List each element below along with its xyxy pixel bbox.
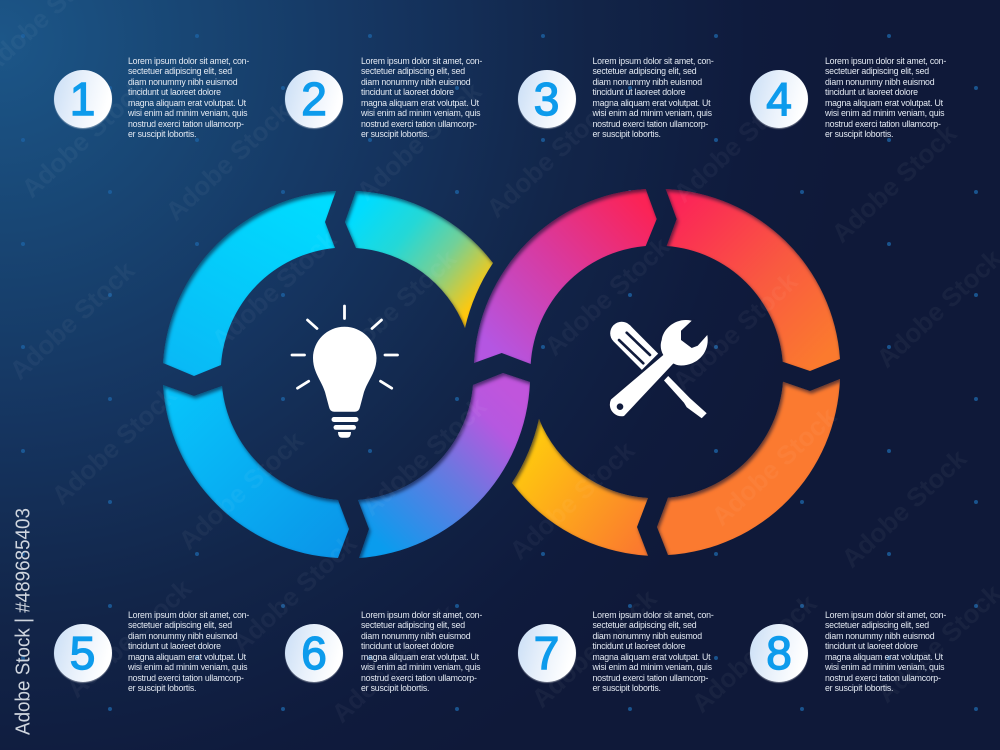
text 7: diam nonummy nibh euismod	[592, 630, 702, 640]
text 2: wisi enim ad minim veniam, quis	[361, 108, 480, 118]
badge 7: 7	[534, 627, 559, 679]
badge 4: 4	[766, 73, 792, 125]
text 6	[361, 610, 482, 693]
step 3	[518, 56, 714, 139]
text 1: sectetuer adipiscing elit, sed	[128, 66, 232, 76]
text 5: diam nonummy nibh euismod	[128, 630, 237, 640]
watermarks: Adobe Stock	[667, 266, 804, 397]
text 3: wisi enim ad minim veniam, quis	[592, 108, 712, 118]
badge 3	[518, 70, 576, 128]
watermarks: Adobe Stock	[539, 231, 676, 362]
badge 7	[518, 624, 576, 682]
vertical stock id: Adobe Stock | #489685403	[12, 508, 34, 735]
text 6: er suscipit lobortis.	[361, 683, 429, 693]
watermarks: Adobe Stock	[46, 380, 183, 511]
text 4	[825, 56, 946, 139]
text 8: tincidunt ut laoreet dolore	[825, 641, 918, 651]
segment: magenta top left	[474, 189, 657, 364]
text 5: magna aliquam erat volutpat. Ut	[128, 652, 246, 662]
watermarks: Adobe Stock	[326, 243, 463, 374]
text 7: er suscipit lobortis.	[592, 683, 661, 693]
text 3	[592, 56, 714, 139]
text 4: er suscipit lobortis.	[825, 129, 893, 139]
text 7: magna aliquam erat volutpat. Ut	[592, 652, 710, 662]
text 4: diam nonummy nibh euismod	[825, 76, 934, 86]
right ring	[474, 189, 840, 556]
text 7: Lorem ipsum dolor sit amet, con-	[592, 610, 714, 620]
text 4: nostrud exerci tation ullamcorp-	[825, 118, 941, 128]
text 8: wisi enim ad minim veniam, quis	[825, 662, 944, 672]
badge 3: 3	[534, 73, 559, 125]
icon: light bulb	[292, 306, 398, 438]
text 4: tincidunt ut laoreet dolore	[825, 87, 918, 97]
badge 8	[750, 624, 808, 682]
text 6: magna aliquam erat volutpat. Ut	[361, 652, 479, 662]
text 6: diam nonummy nibh euismod	[361, 630, 470, 640]
text 4: magna aliquam erat volutpat. Ut	[825, 98, 943, 108]
text 3: magna aliquam erat volutpat. Ut	[592, 98, 710, 108]
text 3: er suscipit lobortis.	[592, 129, 661, 139]
text 6: sectetuer adipiscing elit, sed	[361, 620, 465, 630]
text 8	[825, 610, 946, 693]
text 7: nostrud exerci tation ullamcorp-	[592, 672, 708, 682]
watermarks: Adobe Stock	[206, 224, 343, 355]
watermarks: Adobe Stock	[351, 76, 488, 207]
text 5	[128, 610, 249, 693]
text 2: nostrud exerci tation ullamcorp-	[361, 118, 477, 128]
badge 1	[54, 70, 112, 128]
badge 4	[750, 70, 808, 128]
text 2: er suscipit lobortis.	[361, 129, 429, 139]
segment: yellow bottom left	[512, 419, 648, 556]
text 3: tincidunt ut laoreet dolore	[592, 87, 685, 97]
text 8: Lorem ipsum dolor sit amet, con-	[825, 610, 946, 620]
text 2: sectetuer adipiscing elit, sed	[361, 66, 465, 76]
watermarks: Adobe Stock	[4, 255, 141, 386]
text 5: Lorem ipsum dolor sit amet, con-	[128, 610, 249, 620]
badge 6	[285, 624, 343, 682]
badge 1: 1	[70, 73, 95, 125]
text 1: magna aliquam erat volutpat. Ut	[128, 98, 246, 108]
text 3: Lorem ipsum dolor sit amet, con-	[592, 56, 714, 66]
segment: red top right	[666, 189, 840, 371]
watermarks: Adobe Stock	[226, 528, 363, 659]
text 2: Lorem ipsum dolor sit amet, con-	[361, 56, 482, 66]
watermarks: Adobe Stock	[160, 96, 297, 227]
left ring	[163, 191, 530, 558]
text 5: wisi enim ad minim veniam, quis	[128, 662, 247, 672]
text 4: sectetuer adipiscing elit, sed	[825, 66, 929, 76]
text 6: wisi enim ad minim veniam, quis	[361, 662, 480, 672]
text 1: tincidunt ut laoreet dolore	[128, 87, 221, 97]
text 8: diam nonummy nibh euismod	[825, 630, 934, 640]
text 6: Lorem ipsum dolor sit amet, con-	[361, 610, 482, 620]
text 6: tincidunt ut laoreet dolore	[361, 641, 454, 651]
text 8: er suscipit lobortis.	[825, 683, 893, 693]
text 3: diam nonummy nibh euismod	[592, 76, 702, 86]
text 5: nostrud exerci tation ullamcorp-	[128, 672, 244, 682]
text 7: wisi enim ad minim veniam, quis	[592, 662, 712, 672]
step 6	[284, 610, 482, 693]
text 8: magna aliquam erat volutpat. Ut	[825, 652, 943, 662]
text 5: tincidunt ut laoreet dolore	[128, 641, 221, 651]
badge 5	[54, 624, 112, 682]
text 7: tincidunt ut laoreet dolore	[592, 641, 685, 651]
badge 2: 2	[301, 73, 327, 125]
text 1: nostrud exerci tation ullamcorp-	[128, 118, 244, 128]
text 1: Lorem ipsum dolor sit amet, con-	[128, 56, 249, 66]
watermarks: Adobe Stock	[668, 78, 805, 209]
text 6: nostrud exerci tation ullamcorp-	[361, 672, 477, 682]
segment: top left	[163, 191, 336, 376]
text 8: nostrud exerci tation ullamcorp-	[825, 672, 941, 682]
text 5: sectetuer adipiscing elit, sed	[128, 620, 232, 630]
icon: crossed wrench and screwdriver	[610, 320, 708, 418]
watermarks: Adobe Stock	[16, 73, 153, 204]
watermarks: Adobe Stock	[356, 391, 493, 522]
badge 8: 8	[766, 627, 792, 679]
step 7	[518, 610, 714, 693]
text 1: diam nonummy nibh euismod	[128, 76, 237, 86]
segment: bottom right	[358, 373, 530, 558]
text 1	[128, 56, 249, 139]
text 4: wisi enim ad minim veniam, quis	[825, 108, 944, 118]
text 2: diam nonummy nibh euismod	[361, 76, 470, 86]
segment: orange bottom right	[657, 379, 840, 555]
segment: bottom left	[163, 385, 349, 558]
segment: top right	[345, 191, 493, 328]
text 4: Lorem ipsum dolor sit amet, con-	[825, 56, 946, 66]
step 8	[750, 610, 946, 693]
step 1	[54, 56, 758, 139]
badge 6: 6	[301, 627, 327, 679]
step 2	[284, 56, 482, 139]
badge 5: 5	[70, 627, 95, 679]
watermarks: Adobe Stock	[826, 118, 963, 249]
text 7	[592, 610, 714, 693]
text 8: sectetuer adipiscing elit, sed	[825, 620, 929, 630]
text 1: wisi enim ad minim veniam, quis	[128, 108, 247, 118]
text 7: sectetuer adipiscing elit, sed	[592, 620, 696, 630]
watermarks: Adobe Stock	[173, 425, 310, 556]
watermarks: Adobe Stock	[836, 443, 973, 574]
text 2: tincidunt ut laoreet dolore	[361, 87, 454, 97]
text 2	[361, 56, 482, 139]
text 3: nostrud exerci tation ullamcorp-	[592, 118, 708, 128]
text 1: er suscipit lobortis.	[128, 129, 196, 139]
badge 2	[285, 70, 343, 128]
watermarks: Adobe Stock	[326, 598, 463, 729]
watermarks: Adobe Stock	[481, 93, 618, 224]
text 5: er suscipit lobortis.	[128, 683, 196, 693]
watermarks: Adobe Stock	[686, 588, 823, 719]
watermarks: Adobe Stock	[706, 401, 843, 532]
watermarks: Adobe Stock	[61, 573, 198, 704]
text 2: magna aliquam erat volutpat. Ut	[361, 98, 479, 108]
step 4	[750, 56, 946, 139]
watermarks: Adobe Stock	[504, 435, 641, 566]
step 5	[54, 610, 758, 693]
text 3: sectetuer adipiscing elit, sed	[592, 66, 696, 76]
watermarks: Adobe Stock	[526, 583, 663, 714]
